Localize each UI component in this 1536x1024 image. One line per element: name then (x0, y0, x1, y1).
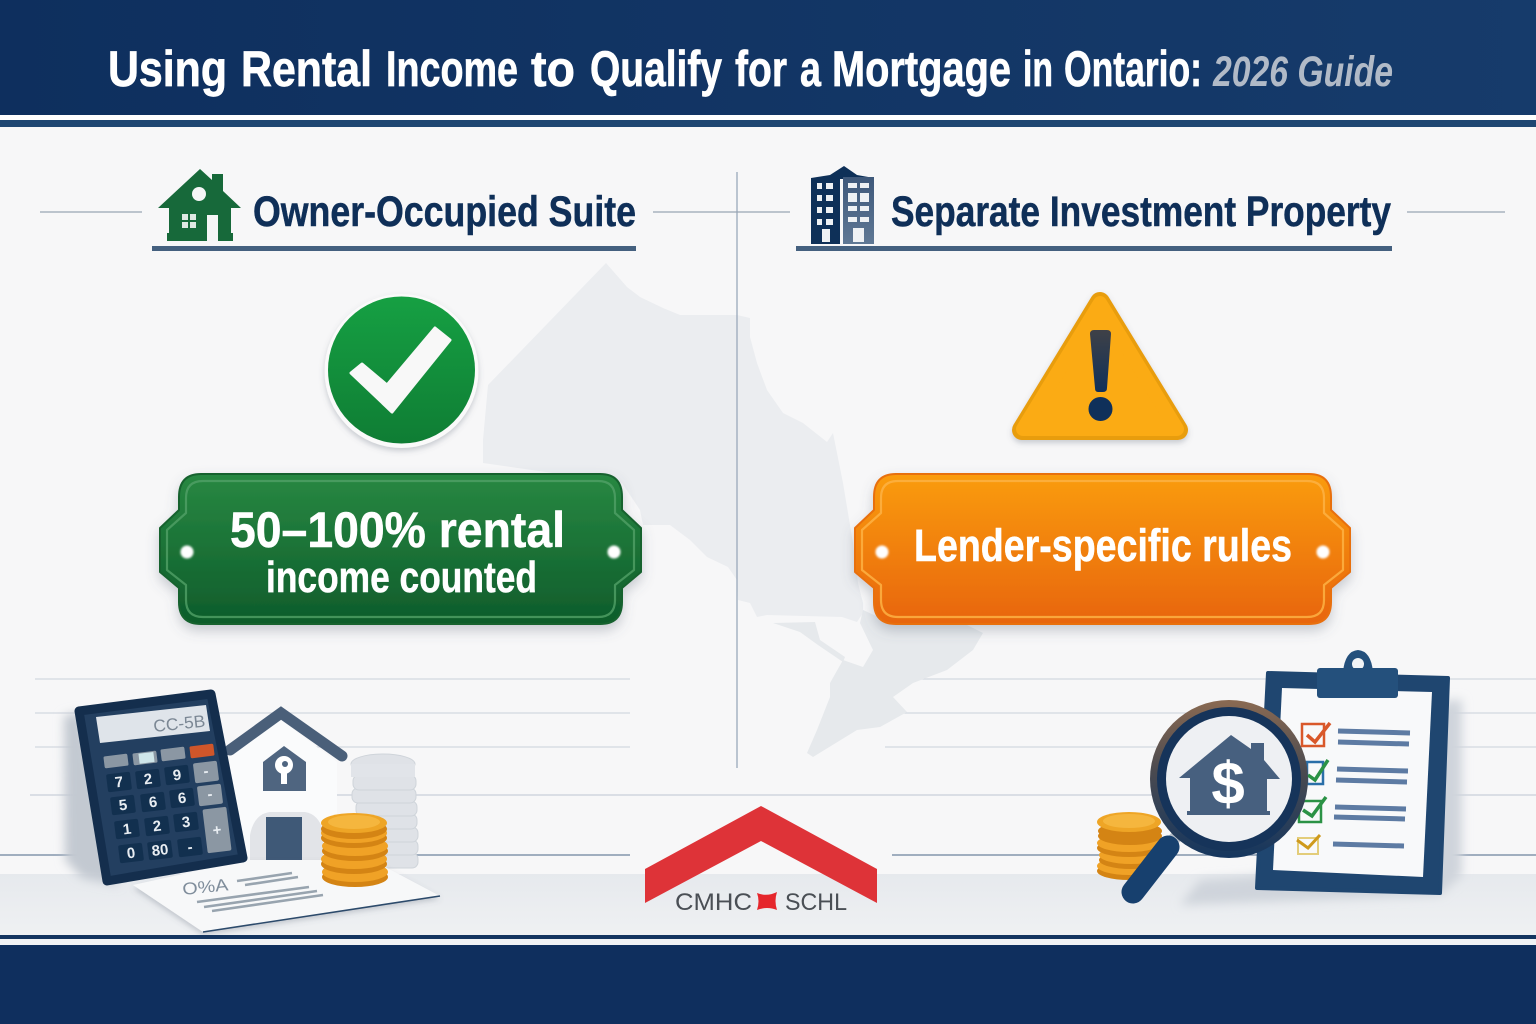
title: Rental (241, 41, 372, 97)
badge: 50–100% rental income counted: 50–100% rental (230, 502, 565, 558)
icon: document: O%A (181, 875, 230, 899)
icon: check mark circle (324, 294, 478, 448)
icon: calculator: 6 (177, 790, 187, 807)
title: Income (386, 41, 518, 97)
panel: owner-occupied suite (152, 169, 641, 624)
icon: calculator (79, 694, 243, 881)
icon: clipboard checklist (1257, 650, 1448, 893)
icon: gold coins (1097, 812, 1163, 880)
icon: magnifying glass: $ (1211, 750, 1245, 817)
icon: document (133, 860, 440, 932)
illustration: calculator, house, coins and document (64, 694, 440, 932)
heading side rules (40, 211, 1505, 213)
heading underline (796, 246, 1392, 251)
title: Using (108, 41, 227, 97)
icon: apartment building (811, 166, 874, 244)
icon: calculator: 3 (181, 814, 191, 831)
title: a (800, 41, 822, 97)
icon: calculator: 2 (152, 818, 162, 835)
shadow: calculator (64, 712, 118, 885)
divider: vertical centre rule (736, 172, 738, 768)
heading: separate investment property: Separate Investment Property (891, 188, 1391, 236)
icon: warning triangle (1022, 302, 1178, 430)
title (108, 41, 1202, 97)
icon: calculator: 0 (126, 845, 136, 862)
title: Mortgage (832, 41, 1011, 97)
icon: calculator: 2 (143, 771, 153, 788)
icon: grey coin stack (351, 754, 418, 868)
header band (0, 0, 1536, 127)
badge: lender-specific rules: Lender-specific rules (914, 520, 1292, 571)
floor band (0, 874, 1536, 936)
illustration: clipboard, magnifier and coins (1097, 650, 1462, 905)
badge: 50–100% rental income counted: income counted (266, 553, 537, 602)
title: Ontario: (1064, 41, 1202, 97)
paper background (0, 127, 1536, 937)
logo: CMHC SCHL (645, 806, 877, 916)
title: to (531, 41, 575, 97)
icon: calculator: 7 (114, 774, 124, 791)
icon: calculator: - (187, 839, 194, 856)
title year: 2026 Guide (1212, 48, 1393, 96)
logo: CMHC SCHL: SCHL (785, 889, 847, 916)
icon: white house (230, 713, 342, 860)
panel: separate investment property (796, 166, 1392, 624)
badge: 50–100% rental income counted (160, 474, 641, 624)
background ruled lines (0, 679, 1536, 855)
icon: calculator: - (202, 763, 209, 780)
heading underline (152, 246, 636, 251)
footer band (0, 935, 1536, 1024)
title: in (1023, 41, 1053, 97)
logo: CMHC SCHL: CMHC (675, 889, 752, 916)
map: Ontario silhouette (483, 263, 983, 757)
badge: lender-specific rules (855, 474, 1350, 624)
icon: calculator: 9 (172, 767, 182, 784)
icon: calculator: + (212, 821, 223, 839)
shadow: clipboard (1180, 700, 1462, 905)
icon: gold coins (321, 813, 388, 887)
heading: owner-occupied suite: Owner-Occupied Suite (253, 188, 636, 236)
icon: calculator: 1 (122, 821, 132, 838)
icon: calculator: 5 (118, 797, 128, 814)
icon: calculator: - (206, 786, 213, 803)
icon: calculator: 6 (148, 794, 158, 811)
title: Qualify (590, 41, 722, 97)
icon: calculator: 80 (151, 841, 169, 860)
icon: green house (158, 169, 241, 241)
title: for (735, 41, 787, 97)
icon: magnifying glass (1133, 700, 1308, 892)
icon: calculator: CC-5B (152, 712, 206, 736)
